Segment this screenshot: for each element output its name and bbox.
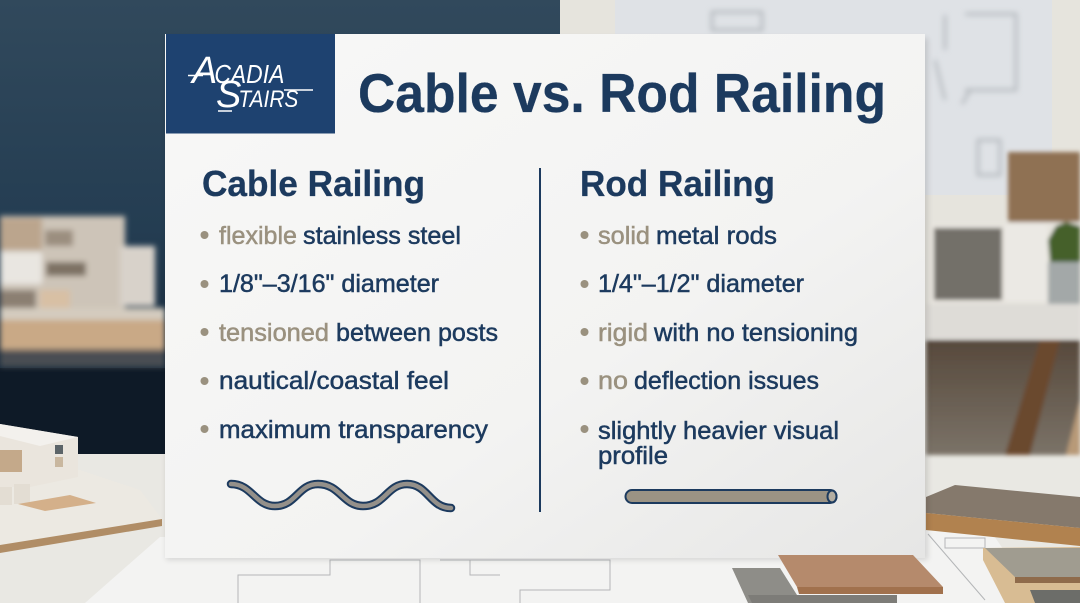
icon: solid rod — [626, 490, 836, 503]
background: blurred architectural model on shelf — [0, 216, 165, 367]
list item: maximum transparency: maximum transparency — [219, 416, 489, 444]
divider between columns — [539, 168, 541, 512]
list item: flexible stainless steel — [200, 222, 461, 250]
card shadow — [166, 38, 928, 560]
background: right desk, wood panel, laptop and plant — [926, 152, 1080, 455]
logo: Acadia Stairs — [166, 34, 335, 134]
list item: slightly heavier visual profile — [580, 417, 839, 470]
list item: solid metal rods: solid — [598, 222, 650, 250]
list item: tensioned between posts — [200, 319, 498, 347]
logo: Acadia Stairs: ACADIA — [190, 50, 284, 92]
list item: solid metal rods: metal rods — [656, 222, 777, 250]
list item: no deflection issues: no — [598, 367, 628, 395]
material samples in front of board — [732, 555, 943, 603]
list item: nautical/coastal feel: nautical/coastal feel — [219, 367, 449, 395]
icon: wavy cable — [231, 484, 451, 508]
list item: solid metal rods — [580, 222, 777, 250]
list item: rigid with no tensioning: rigid — [598, 319, 648, 347]
background: large wood sample board — [926, 485, 1080, 603]
list item: flexible stainless steel: stainless steel — [303, 222, 461, 250]
list item: slightly heavier visual profile: slightly heavier visual — [598, 417, 839, 445]
list item: slightly heavier visual profile: profile — [598, 442, 668, 470]
list item: rigid with no tensioning: with no tensioning — [653, 319, 858, 347]
list item: tensioned between posts: tensioned — [219, 319, 329, 347]
list item: flexible stainless steel: flexible — [219, 222, 297, 250]
list item: rod diameter: 1/4"–1/2" diameter — [598, 270, 804, 298]
list item: tensioned between posts: between posts — [336, 319, 498, 347]
list item: cable diameter: 1/8"–3/16" diameter — [219, 270, 439, 298]
panel: cable railing column — [200, 163, 498, 508]
heading: rod railing: Rod Railing — [580, 163, 775, 204]
title: Cable vs. Rod Railing — [358, 62, 886, 124]
panel: rod railing column — [580, 163, 858, 503]
heading: cable railing: Cable Railing — [202, 163, 425, 204]
background: model house foreground — [0, 424, 162, 553]
list item: no deflection issues: deflection issues — [634, 367, 819, 395]
panel: white comparison board — [165, 34, 925, 558]
logo: Acadia Stairs: STAIRS — [216, 74, 298, 116]
background: blueprint sheet under card — [85, 530, 1040, 603]
background: table surface — [0, 454, 1080, 603]
